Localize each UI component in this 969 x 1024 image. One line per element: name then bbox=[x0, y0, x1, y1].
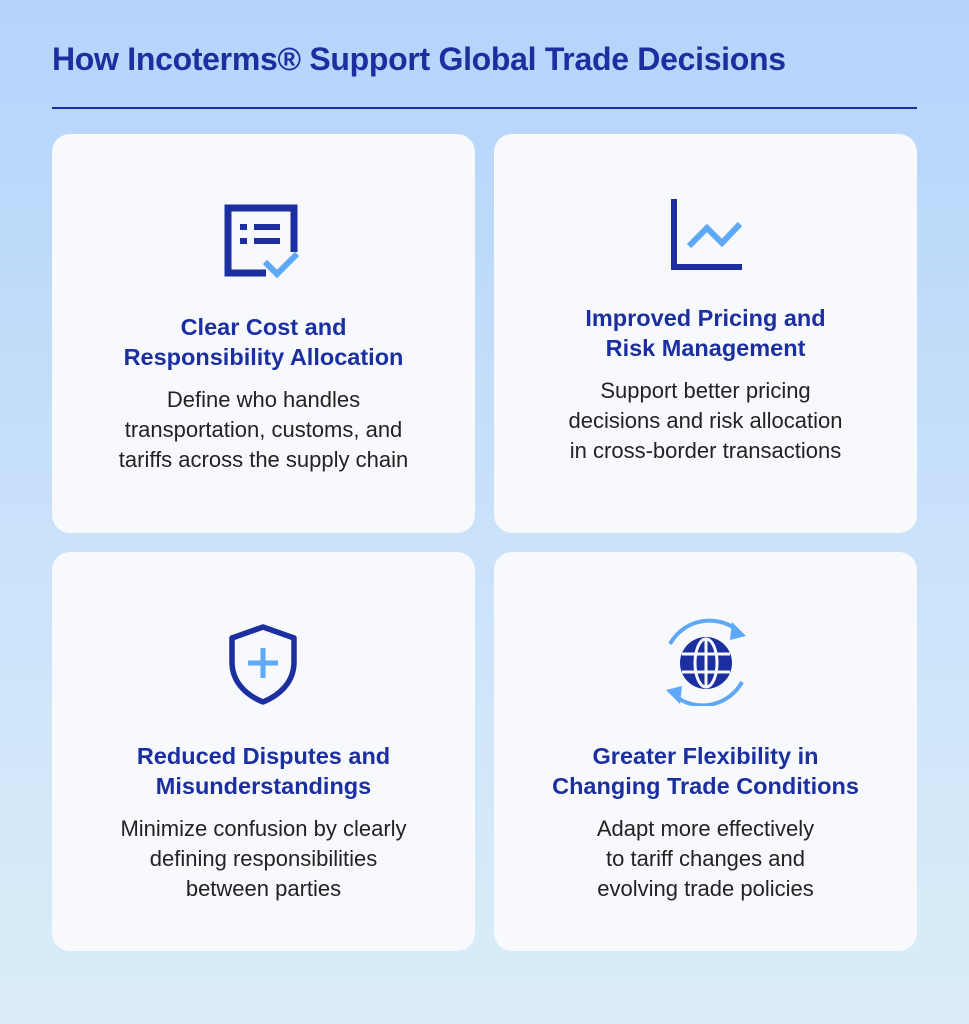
heading: Clear Cost and bbox=[181, 314, 346, 340]
body text bbox=[119, 387, 408, 472]
panel: pricing and risk bbox=[494, 134, 917, 533]
panel: cost allocation bbox=[52, 134, 475, 533]
body text: Adapt more effectively bbox=[597, 816, 814, 841]
heading: Responsibility Allocation bbox=[124, 344, 403, 370]
heading bbox=[124, 314, 403, 370]
heading bbox=[137, 743, 390, 799]
heading bbox=[585, 305, 826, 361]
body text: between parties bbox=[186, 876, 341, 901]
body text: Minimize confusion by clearly bbox=[120, 816, 407, 841]
body text bbox=[569, 378, 842, 463]
panel: reduced disputes bbox=[52, 552, 475, 951]
body text: defining responsibilities bbox=[150, 846, 377, 871]
body text bbox=[120, 816, 407, 901]
icon: shield plus bbox=[229, 624, 297, 705]
heading: Reduced Disputes and bbox=[137, 743, 390, 769]
panel: flexibility bbox=[494, 552, 917, 951]
body text: tariffs across the supply chain bbox=[119, 447, 408, 472]
heading bbox=[552, 743, 859, 799]
icon: document check bbox=[224, 204, 299, 278]
heading: Changing Trade Conditions bbox=[552, 773, 859, 799]
body text: decisions and risk allocation bbox=[569, 408, 842, 433]
body text: Support better pricing bbox=[600, 378, 811, 403]
heading: Greater Flexibility in bbox=[593, 743, 818, 769]
body text: to tariff changes and bbox=[606, 846, 805, 871]
heading: Misunderstandings bbox=[156, 773, 371, 799]
heading: Improved Pricing and bbox=[585, 305, 826, 331]
icon: line chart bbox=[671, 199, 742, 270]
body text bbox=[597, 816, 814, 901]
body text: in cross-border transactions bbox=[570, 438, 841, 463]
heading: Risk Management bbox=[606, 335, 805, 361]
title: How Incoterms® Support Global Trade Decisions bbox=[52, 41, 786, 77]
body text: transportation, customs, and bbox=[125, 417, 402, 442]
body text: evolving trade policies bbox=[597, 876, 814, 901]
body text: Define who handles bbox=[167, 387, 360, 412]
icon: globe with arrows bbox=[666, 618, 746, 706]
